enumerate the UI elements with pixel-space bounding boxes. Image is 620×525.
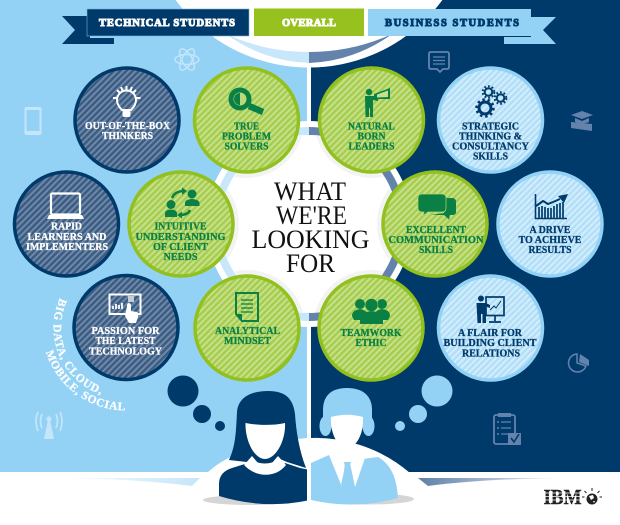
circle: strategic thinking: THINKING & (459, 132, 522, 142)
figure: man (311, 388, 398, 505)
circle: natural born leaders: BORN (358, 132, 386, 142)
icon: graduation cap and books (571, 111, 593, 131)
circle: excellent communication skills (383, 172, 487, 276)
title: what we're looking for: LOOKING (252, 225, 370, 254)
swoosh left (40, 478, 200, 486)
thought bubbles: technical student (168, 376, 225, 431)
circle: true problem solvers (194, 68, 298, 172)
ribbon: technical students: TECHNICAL STUDENTS (99, 18, 235, 29)
ribbon: technical students (62, 9, 249, 44)
circle: strategic thinking: CONSULTANCY (452, 142, 529, 152)
circle: rapid learners and implementers: IMPLEMENTERS (26, 242, 108, 253)
circle: analytical mindset: ANALYTICAL (215, 326, 280, 337)
circle: intuitive understanding (129, 172, 233, 276)
icon: clients and arrows (165, 188, 200, 218)
ribbon: business students: BUSINESS STUDENTS (385, 18, 519, 29)
circle: rapid learners and implementers (14, 172, 118, 276)
icon: clipboard (494, 413, 521, 445)
curved caption: big data, cloud, mobile, social: MOBILE, SOCIAL (46, 349, 125, 410)
icon: smartphone (24, 107, 42, 135)
top arc (144, 0, 474, 68)
circle: natural born leaders: NATURAL (348, 122, 395, 132)
circle: natural born leaders (320, 68, 424, 172)
curved caption: big data, cloud, mobile, social: BIG DATA, CLOUD, (53, 298, 101, 396)
circle: rapid learners and implementers: LEARNERS AND (28, 232, 107, 243)
icon: light bulb (113, 86, 140, 117)
circle: analytical mindset: MINDSET (224, 336, 271, 347)
title: what we're looking for: WE'RE (276, 201, 347, 230)
swoosh right (418, 478, 580, 486)
icon: atom (175, 47, 199, 72)
circle: a drive to achieve results: RESULTS (528, 245, 572, 256)
circle: true problem solvers: PROBLEM (222, 132, 271, 142)
circle: excellent communication skills: EXCELLENT (406, 225, 466, 236)
icon: magnifier (231, 90, 263, 112)
icon: three people (352, 298, 390, 324)
centre hub ring (214, 121, 403, 327)
circle: a drive to achieve results: A DRIVE (530, 225, 570, 236)
circle: true problem solvers: TRUE (234, 122, 259, 132)
icon: speech bubble (429, 52, 449, 72)
circle: intuitive understanding: INTUITIVE (154, 222, 206, 232)
circle: strategic thinking: SKILLS (473, 152, 508, 162)
circle: a drive to achieve results (498, 172, 602, 276)
title: what we're looking for: FOR (286, 249, 336, 278)
icon: document (236, 293, 258, 321)
circle: excellent communication skills: SKILLS (419, 245, 453, 256)
circle: a flair for building client relations: A FLAIR FOR (458, 328, 522, 339)
circle: teamwork ethic: TEAMWORK (340, 328, 402, 339)
icon: rising chart (536, 194, 568, 218)
circle: strategic thinking: STRATEGIC (462, 122, 519, 132)
circle: a flair for building client relations (438, 276, 542, 380)
curved caption: big data, cloud, mobile, social (46, 298, 125, 410)
circle: out-of-the-box thinkers (75, 68, 179, 172)
circle: passion for the latest technology: PASSION FOR (92, 326, 160, 337)
icon: pie chart (569, 354, 589, 372)
panel: technical students background (0, 0, 307, 472)
circle: teamwork ethic (319, 276, 423, 380)
icon: man with megaphone (365, 88, 390, 117)
logo: IBM: IBM (544, 485, 582, 509)
tab: overall (254, 8, 364, 36)
shadow under woman (203, 495, 297, 505)
icon: gears (476, 86, 506, 116)
circle: excellent communication skills: COMMUNICATION (388, 235, 484, 246)
centre divider (307, 64, 311, 120)
circle: analytical mindset (195, 276, 299, 380)
icon: presenter with board (476, 296, 504, 323)
centre divider lower (307, 332, 311, 507)
icon: signal tower (36, 412, 62, 439)
circle: out-of-the-box thinkers: OUT-OF-THE-BOX (85, 121, 170, 132)
tab: overall: OVERALL (282, 18, 336, 29)
circle: intuitive understanding: OF CLIENT (153, 242, 208, 253)
circle: natural born leaders: LEADERS (348, 142, 395, 152)
circle: rapid learners and implementers: RAPID (51, 222, 82, 232)
title: what we're looking for: WHAT (274, 177, 346, 206)
circle: intuitive understanding: NEEDS (164, 252, 198, 263)
icon: laptop (47, 194, 84, 219)
shadow under man (326, 494, 414, 504)
circle: passion for the latest technology: THE LATEST (96, 336, 156, 347)
icon: touch screen and hand (110, 294, 140, 323)
thought bubbles: business student (395, 376, 452, 431)
circle: a drive to achieve results: TO ACHIEVE (518, 235, 582, 246)
title: what we're looking for (252, 177, 370, 278)
ribbon: business students (368, 9, 556, 44)
circle: passion for the latest technology (74, 276, 178, 380)
figure: woman (219, 391, 310, 504)
panel: business students background (311, 0, 620, 472)
circle: a flair for building client relations: BUILDING CLIENT (444, 338, 536, 349)
circle: a flair for building client relations: RELATIONS (462, 348, 520, 360)
icon: speech bubbles (418, 194, 456, 220)
circle: passion for the latest technology: TECHNOLOGY (89, 346, 162, 358)
bottom white wave (208, 438, 410, 473)
circle: strategic thinking (438, 68, 542, 172)
circle: true problem solvers: SOLVERS (224, 142, 269, 152)
circle: intuitive understanding: UNDERSTANDING (136, 232, 226, 243)
circle: teamwork ethic: ETHIC (356, 338, 386, 349)
circle: out-of-the-box thinkers: THINKERS (102, 131, 153, 142)
